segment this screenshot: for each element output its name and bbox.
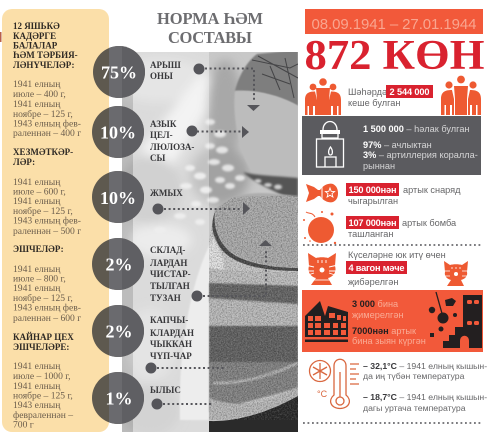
ingredient labels: ЖМЫХ — [150, 188, 183, 198]
top loaf cut face — [234, 90, 298, 178]
group: children: 12 ЯШЬКӘ — [13, 21, 60, 31]
panel: destroyed buildings: 7000нән артык — [352, 326, 417, 336]
temperature text: – 32,1°С – 1941 елның кышын- — [363, 361, 487, 371]
icon: thermometer and frost — [310, 359, 359, 408]
population text: Шәһәрдә — [348, 87, 387, 97]
panel: casualties — [302, 116, 481, 175]
group: workers: ЛӘР: — [13, 157, 35, 167]
circle: 10%: 10% — [100, 188, 136, 208]
lower slice — [214, 193, 298, 268]
stat: bombs: ташланган — [348, 229, 393, 239]
group: workers: июле – 600 г, — [13, 186, 66, 198]
bread stack — [180, 236, 224, 420]
ingredient labels: СЫ — [150, 153, 165, 163]
group: hot shop workers: 1943 елның — [13, 400, 61, 411]
grain — [174, 118, 246, 225]
headline: 872 days: 872 КӨН — [304, 33, 484, 79]
ingredient labels: ЫЛЫС — [150, 385, 181, 395]
population text: кеше булган — [348, 98, 400, 108]
temperature text: – 18,7°С – 1941 елның кышын- — [363, 392, 487, 402]
ingredient labels: ТУЗАН — [150, 293, 181, 303]
title — [157, 9, 263, 47]
group: hot shop workers: КАЙНАР ЦЕХ — [13, 332, 74, 342]
stat: cats — [346, 250, 446, 287]
icon: cat left — [305, 253, 338, 285]
group: children: 1941 елның — [13, 99, 61, 110]
crumb texture — [209, 195, 298, 420]
title: СОСТАВЫ — [168, 28, 252, 47]
stat: cats: 4 вагон мәче — [348, 263, 404, 273]
ingredient labels: ЦЕЛ- — [150, 130, 173, 140]
temperature text — [363, 361, 487, 413]
group: hot shop workers: 1941 елның — [13, 381, 61, 392]
circle: 2%: 2% — [106, 254, 132, 274]
circle: 2% — [92, 238, 144, 290]
photo: bread and grain — [110, 50, 298, 436]
stat: cats: Күселәрне юк итү өчен — [348, 250, 446, 260]
ingredient labels: ЧЫККАН — [150, 339, 192, 349]
icon: shell — [306, 184, 338, 202]
icon: ruined colosseum — [305, 301, 348, 342]
ingredient labels: ЛЮЛОЗА- — [150, 142, 194, 152]
icon: bomb — [303, 211, 336, 244]
date banner — [305, 9, 483, 34]
icon: cat right — [443, 261, 469, 286]
group: children: ЛӘНҮЧЕЛӘР: — [13, 60, 75, 70]
ingredient labels: КЛАРДАН — [150, 328, 194, 338]
title: НОРМА ҺӘМ — [157, 9, 263, 28]
circle: 10% — [92, 106, 144, 158]
population text: 2 544 000 — [390, 87, 430, 97]
group: workers: ХЕЗМӘТКӘР- — [13, 147, 73, 157]
group: employees: 1941 елның — [13, 264, 61, 275]
group: children: ноябре – 125 г, — [13, 109, 73, 120]
circle: 2%: 2% — [106, 322, 132, 342]
panel: destroyed buildings: бина зыян күргән — [352, 336, 426, 346]
panel: destroyed buildings: 3 000 бина — [352, 299, 399, 309]
stat: shells: чыгарылган — [348, 196, 398, 206]
temperature text: дагы уртача температура — [363, 403, 466, 413]
circle: 1%: 1% — [106, 388, 132, 408]
group: hot shop workers: 1941 елның — [13, 361, 61, 372]
temperature text: да иң түбән температура — [363, 371, 465, 381]
group: children: 1943 елның фев- — [13, 118, 81, 130]
circle: 75% — [93, 46, 145, 98]
group: employees: ЭШЧЕЛӘР: — [13, 244, 64, 254]
group: workers: 1943 елның фев- — [13, 216, 81, 226]
group: children — [13, 21, 81, 139]
population text — [348, 85, 433, 108]
group: children: ҺӘМ ТӘРБИЯ- — [13, 50, 78, 60]
icon: people right — [441, 76, 481, 115]
panel: casualties: рыннан — [363, 161, 395, 171]
group: workers: 1941 елның — [13, 177, 61, 188]
group: hot shop workers: ЭШЧЕЛӘРЕ: — [13, 342, 69, 352]
group: hot shop workers: 700 г — [13, 420, 34, 430]
group: workers — [13, 147, 81, 237]
ingredient labels: АРЫШ — [150, 60, 181, 70]
group: children: БАЛАЛАР — [13, 40, 58, 50]
circle: 75%: 75% — [101, 62, 137, 82]
percent circles — [92, 46, 145, 424]
group: employees — [13, 244, 81, 324]
pointers: dots and dotted arrows — [146, 64, 272, 410]
stat: cats: җибәрелгән — [348, 277, 398, 287]
stat: shells: 150 000нән — [348, 185, 396, 195]
group: employees: ноябре – 125 г, — [13, 293, 73, 304]
stat: bombs — [346, 216, 457, 239]
panel: casualties: 97% – ачлыктан — [363, 140, 432, 150]
circle: 10%: 10% — [100, 122, 136, 142]
stat: shells — [346, 183, 461, 206]
circle: 1% — [92, 372, 144, 424]
dark crescent with grains — [243, 172, 298, 197]
panel: casualties: 1 500 000 – һәлак булган — [363, 124, 470, 134]
group: hot shop workers — [13, 332, 74, 430]
group: hot shop workers: июле – 1000 г, — [13, 371, 71, 382]
ingredient labels: СКЛАД- — [150, 245, 185, 255]
group: employees: июле – 800 г, — [13, 274, 66, 284]
ingredient labels: ЧҮП-ЧАР — [150, 351, 192, 361]
ingredient labels: КАПЧЫ- — [150, 315, 188, 325]
group: children: КАДӘРГЕ — [13, 31, 56, 41]
stat: bombs: артык бомба — [402, 218, 457, 228]
group: hot shop workers: ноябре – 125 г, — [13, 390, 73, 402]
icon: thermometer and frost: °C — [317, 389, 328, 399]
icon: wrecking ball and building — [429, 292, 482, 348]
ingredient labels: ОНЫ — [150, 71, 173, 81]
circle: 2% — [92, 305, 144, 357]
icon: memorial lamp — [316, 122, 344, 167]
group: children: 1941 елның — [13, 79, 61, 90]
panel: casualties: 3% – артиллерия коралла- — [363, 150, 478, 160]
group: workers: раленнән – 500 г — [13, 226, 81, 237]
group: employees: раленнән – 600 г — [13, 313, 81, 324]
stat: bombs: 107 000нән — [348, 218, 396, 228]
top loaf crust — [235, 50, 298, 106]
ingredient labels: АЗЫК — [150, 119, 177, 129]
ingredient labels: ТЫЛГАН — [150, 281, 190, 291]
circle: 10% — [92, 171, 144, 223]
group: children: июле – 400 г, — [13, 89, 66, 100]
group: workers: 1941 елның — [13, 196, 61, 207]
panel: destroyed buildings: җимерелгән — [352, 310, 404, 320]
date banner: 08.09.1941 – 27.01.1944 — [312, 16, 476, 33]
group: employees: 1941 елның — [13, 283, 61, 294]
group: children: раленнән – 400 г — [13, 128, 81, 139]
ingredient labels — [150, 60, 194, 395]
panel: rations for groups — [0, 9, 109, 432]
group: employees: 1943 елның фев- — [13, 302, 81, 314]
group: workers: ноябре – 125 г, — [13, 206, 73, 217]
icon: people left — [305, 78, 341, 115]
ingredient labels: ЧИСТАР- — [150, 269, 191, 279]
group: hot shop workers: февраленнән – — [13, 410, 73, 421]
ingredient labels: ЛАРДАН — [150, 258, 187, 268]
stat: shells: артык снаряд — [403, 185, 461, 195]
panel: destroyed buildings — [302, 290, 483, 352]
